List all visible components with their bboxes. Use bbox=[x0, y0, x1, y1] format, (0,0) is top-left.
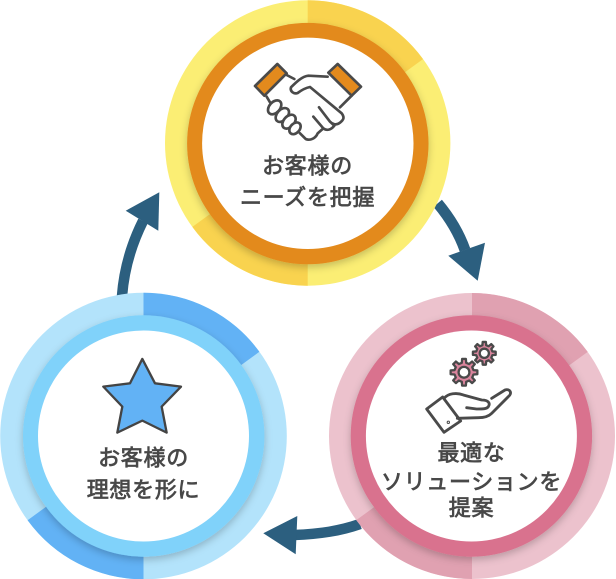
icon: handshake bbox=[255, 64, 361, 140]
outer ring bbox=[329, 293, 615, 579]
label: customer needs bbox=[240, 154, 375, 210]
icon: gears and hand bbox=[427, 342, 511, 432]
icon: small gear bbox=[473, 342, 496, 365]
white centre bbox=[202, 38, 414, 249]
icon: star bbox=[103, 359, 181, 433]
arrow: needs to solution bbox=[438, 203, 485, 281]
label: customer needs: ニーズを把握 bbox=[240, 185, 375, 210]
arrow: ideal to needs bbox=[122, 192, 159, 296]
white centre bbox=[366, 330, 577, 542]
panel: customer ideal bbox=[0, 293, 287, 579]
inner ring bbox=[187, 23, 428, 264]
label: customer ideal: お客様の bbox=[98, 446, 189, 470]
label: customer ideal bbox=[87, 446, 200, 502]
inner ring bbox=[23, 315, 264, 557]
label: customer needs: お客様の bbox=[262, 154, 353, 178]
icon: large gear bbox=[451, 359, 477, 386]
outer ring bbox=[165, 0, 450, 286]
white centre bbox=[38, 330, 249, 542]
panel: optimal solution bbox=[329, 293, 615, 579]
label: optimal solution: ソリューションを bbox=[381, 470, 562, 494]
inner ring bbox=[351, 315, 592, 557]
label: optimal solution: 提案 bbox=[449, 496, 494, 520]
panel: customer needs bbox=[165, 0, 450, 286]
outer ring bbox=[0, 293, 287, 579]
label: optimal solution bbox=[381, 440, 562, 520]
label: optimal solution: 最適な bbox=[437, 440, 506, 466]
arrow: solution to ideal bbox=[263, 516, 360, 554]
icon: open hand bbox=[427, 390, 511, 432]
label: customer ideal: 理想を形に bbox=[87, 478, 200, 502]
